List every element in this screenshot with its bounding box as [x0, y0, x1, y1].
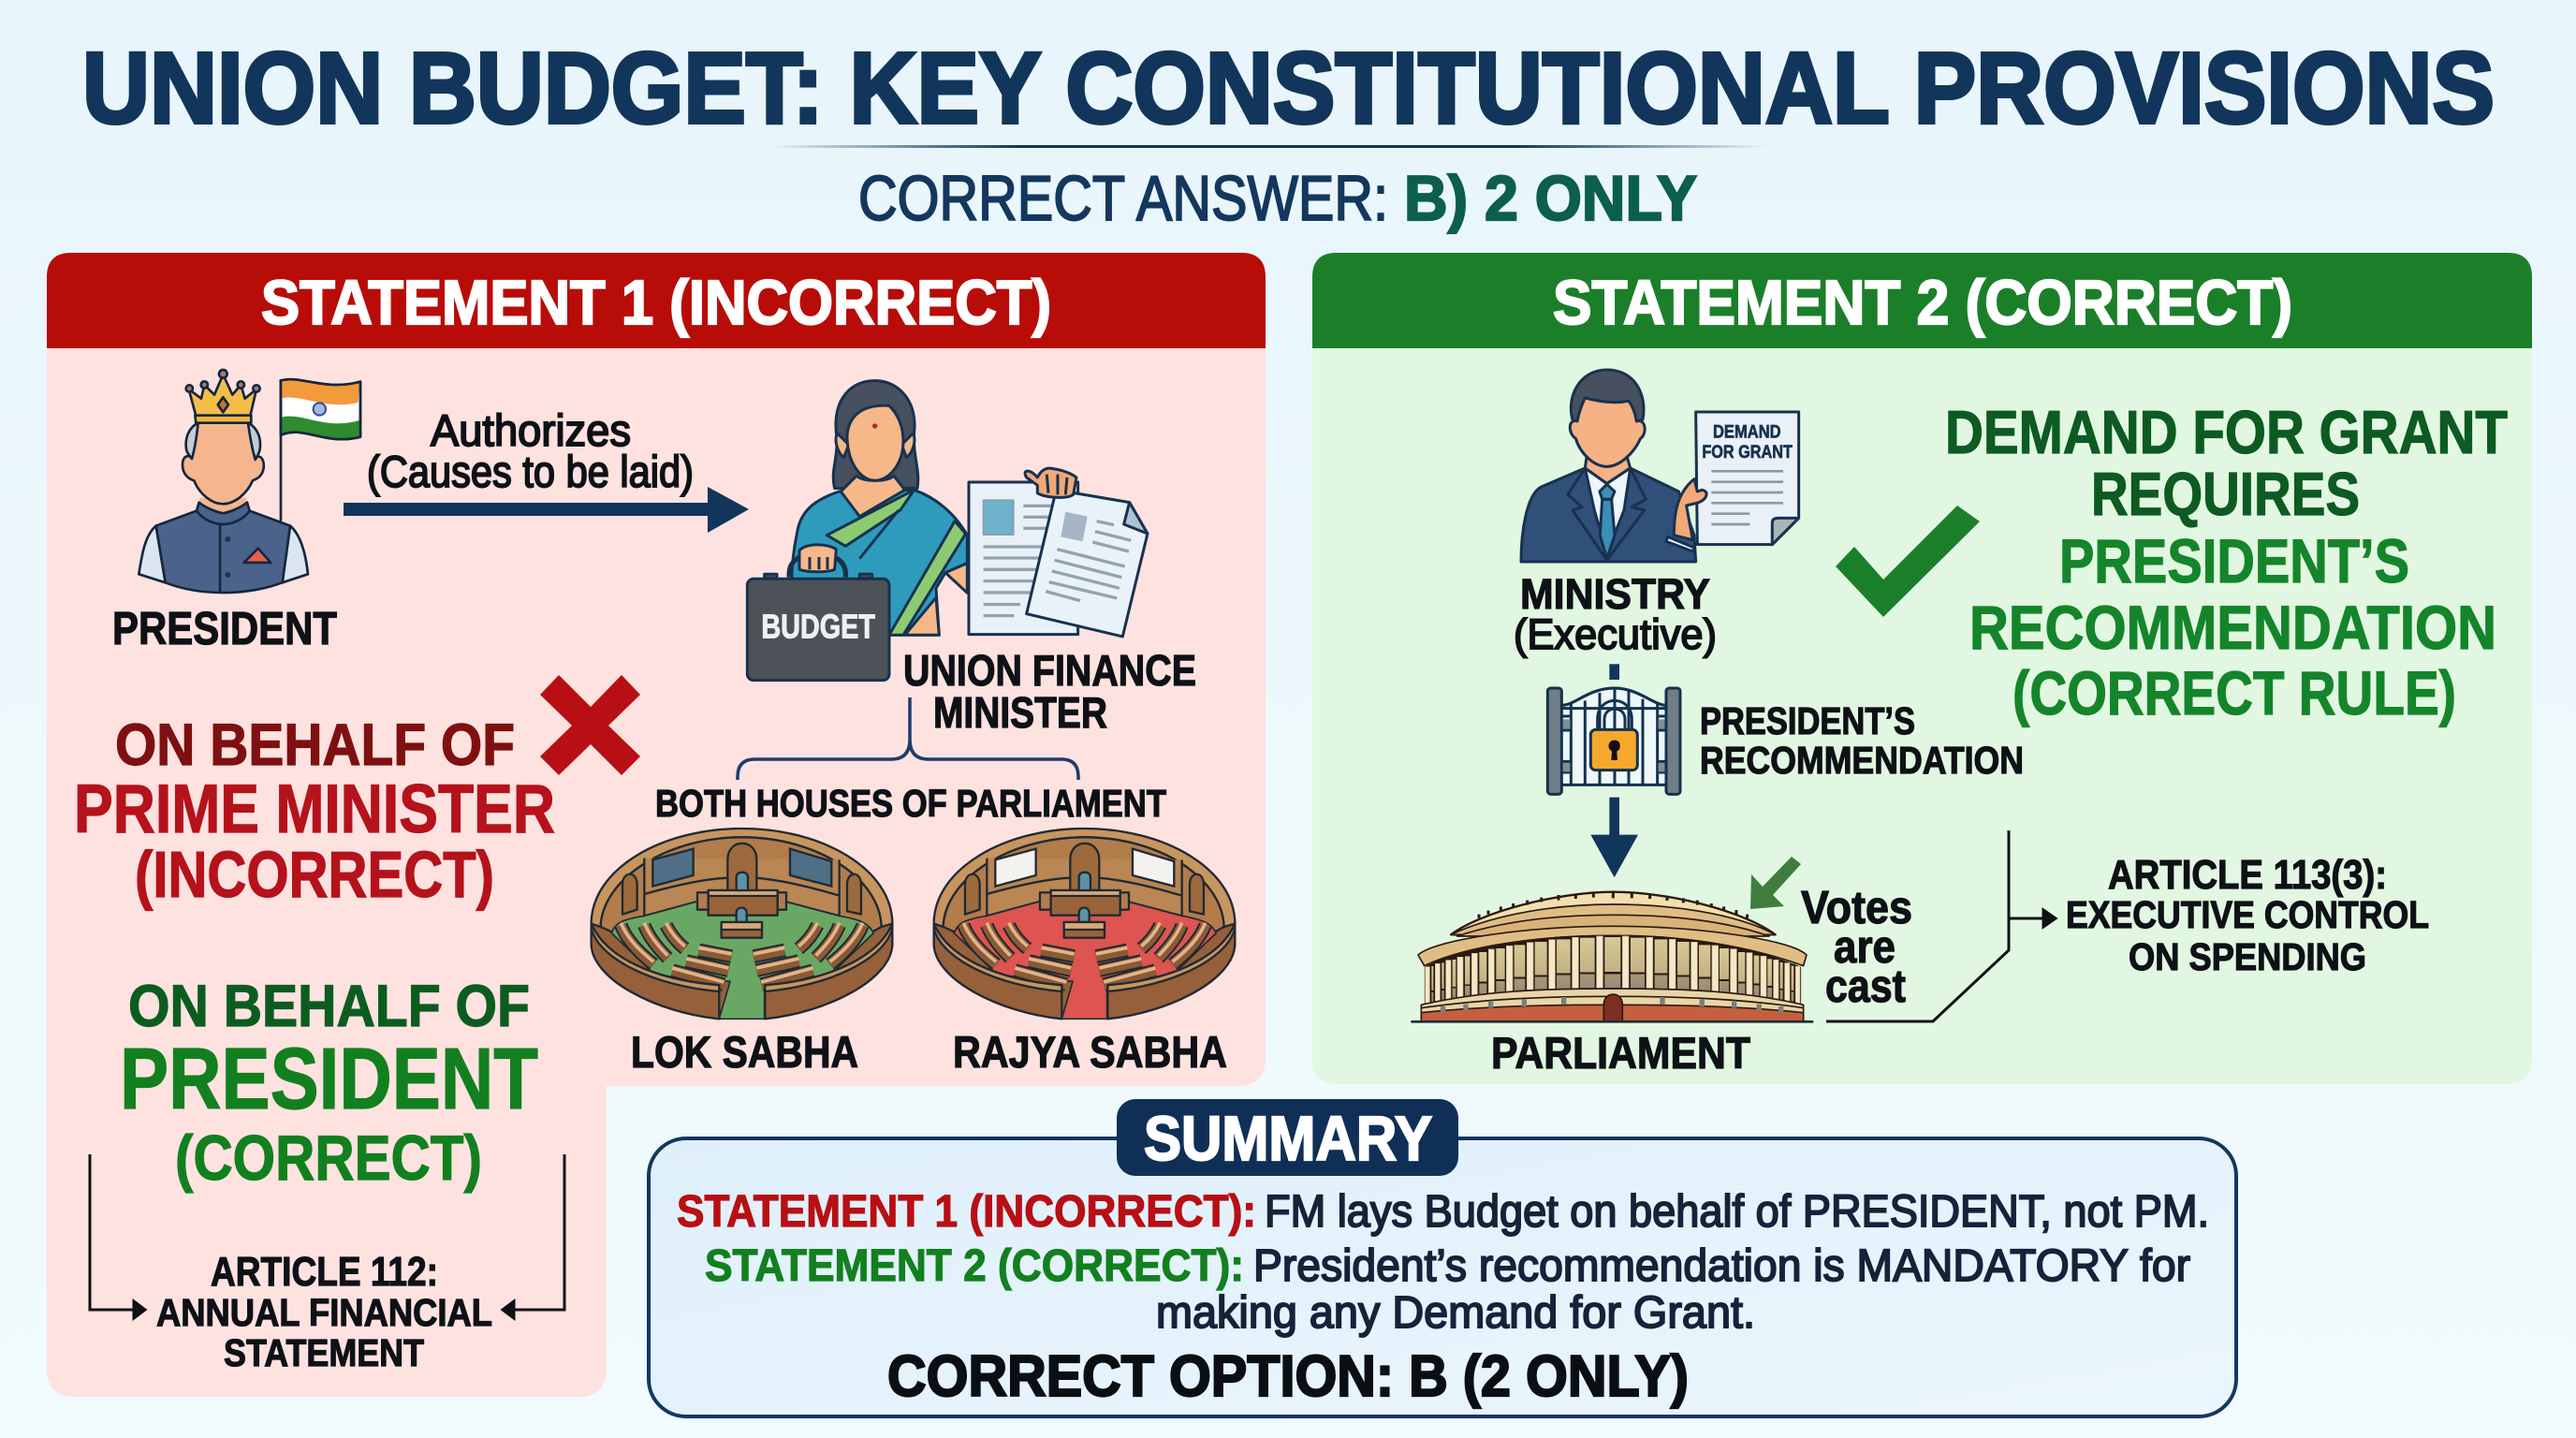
icon: parliament building — [1411, 892, 1813, 1021]
subtitle: correct answer: B) 2 ONLY — [1404, 163, 1697, 234]
callout: on behalf of president (correct) — [120, 974, 538, 1194]
label: union finance minister: MINISTER — [933, 688, 1107, 737]
summary line 2: STATEMENT 2 (CORRECT): — [705, 1241, 1244, 1291]
callout: demand for grant rule: (CORRECT RULE) — [2012, 658, 2456, 727]
summary line 2: President’s recommendation is MANDATORY for — [1253, 1241, 2190, 1291]
panel: summary — [649, 1099, 2236, 1416]
callout: on behalf of prime minister (incorrect): (INCORRECT) — [135, 838, 494, 911]
label: president's recommendation: PRESIDENT’S — [1700, 699, 1915, 742]
label: president's recommendation: RECOMMENDATION — [1700, 739, 2024, 782]
icon: union finance minister with briefcase and documents — [747, 381, 1148, 681]
article 112 text: ANNUAL FINANCIAL — [156, 1291, 492, 1334]
statement 2 heading: STATEMENT 2 (CORRECT) — [1553, 268, 2292, 338]
icon: lok sabha chamber — [592, 829, 892, 1019]
statement 1 heading: STATEMENT 1 (INCORRECT) — [261, 268, 1051, 338]
label: votes are cast: are — [1834, 922, 1895, 973]
label: rajya sabha: RAJYA SABHA — [953, 1027, 1227, 1077]
panel: statement 1 — [47, 253, 1266, 1397]
callout: on behalf of prime minister (incorrect): PRIME MINISTER — [74, 771, 555, 847]
arrow: votes pointer — [1750, 857, 1801, 909]
label: ministry (executive): (Executive) — [1514, 610, 1717, 658]
label: both houses of parliament: BOTH HOUSES OF PARLIAMENT — [655, 782, 1166, 825]
callout: on behalf of president (correct): (CORRECT) — [175, 1123, 482, 1194]
label: ministry (executive) — [1514, 570, 1717, 658]
label: authorizes: (Causes to be laid) — [367, 447, 694, 496]
callout: on behalf of prime minister (incorrect) — [74, 712, 555, 911]
label: president's recommendation — [1700, 699, 2024, 782]
briefcase label: BUDGET — [761, 608, 875, 646]
summary badge: SUMMARY — [1144, 1104, 1432, 1174]
arrow: president to finance minister — [344, 487, 749, 533]
label: votes are cast: Votes — [1801, 883, 1912, 933]
summary line 1: FM lays Budget on behalf of PRESIDENT, not PM. — [1265, 1187, 2209, 1237]
document label: FOR GRANT — [1702, 443, 1793, 462]
article 112 text: ARTICLE 112: — [211, 1249, 438, 1295]
document label — [1702, 423, 1793, 462]
connector: votes to article 113(3) — [1826, 830, 2056, 1021]
article 112 text: STATEMENT — [224, 1331, 424, 1374]
label: authorizes — [367, 405, 694, 496]
bracket: to both houses — [738, 697, 1078, 780]
document label: DEMAND — [1713, 423, 1781, 443]
callout: demand for grant rule: RECOMMENDATION — [1969, 593, 2496, 662]
label: union finance minister: UNION FINANCE — [903, 646, 1196, 695]
summary line 3: making any Demand for Grant. — [1156, 1288, 1755, 1338]
callout: demand for grant rule: REQUIRES — [2091, 460, 2360, 528]
label: parliament: PARLIAMENT — [1491, 1028, 1750, 1078]
icon: red cross — [540, 675, 640, 775]
panel: statement 2 — [1312, 253, 2532, 1084]
icon: president with crown and flag — [139, 370, 360, 593]
icon: rajya sabha chamber — [934, 829, 1235, 1019]
callout: on behalf of president (correct): ON BEHALF OF — [128, 974, 530, 1039]
article 113(3) text: ARTICLE 113(3): — [2108, 852, 2387, 898]
callout: demand for grant rule: DEMAND FOR GRANT — [1945, 398, 2508, 466]
article 113(3) text: EXECUTIVE CONTROL — [2066, 893, 2429, 936]
summary line 2 — [705, 1241, 2190, 1291]
callout: demand for grant rule: PRESIDENT’S — [2059, 526, 2409, 595]
label: votes are cast — [1801, 883, 1912, 1012]
article 113(3) text: ON SPENDING — [2129, 935, 2366, 978]
summary line 1 — [677, 1187, 2209, 1237]
callout: on behalf of president (correct): PRESIDENT — [120, 1030, 538, 1127]
icon: ministry official holding demand for grant — [1521, 370, 1799, 562]
label: votes are cast: cast — [1825, 961, 1906, 1012]
subtitle: correct answer: CORRECT ANSWER: — [858, 163, 1388, 234]
icon: locked gate with arrow — [1547, 664, 1680, 877]
label: lok sabha: LOK SABHA — [631, 1027, 858, 1077]
bracket arrows to article 112 — [90, 1154, 564, 1318]
icon: green check mark — [1836, 506, 1980, 617]
article 112 text — [156, 1249, 492, 1374]
correct option: CORRECT OPTION: B (2 ONLY) — [887, 1344, 1689, 1409]
article 113(3) text — [2066, 852, 2429, 978]
label: authorizes: Authorizes — [431, 405, 631, 455]
label: president: PRESIDENT — [112, 604, 337, 654]
callout: on behalf of prime minister (incorrect): ON BEHALF OF — [115, 712, 515, 778]
summary line 1: STATEMENT 1 (INCORRECT): — [677, 1187, 1256, 1237]
label: union finance minister — [903, 646, 1196, 737]
label: ministry (executive): MINISTRY — [1520, 570, 1710, 618]
callout: demand for grant rule — [1945, 398, 2508, 727]
